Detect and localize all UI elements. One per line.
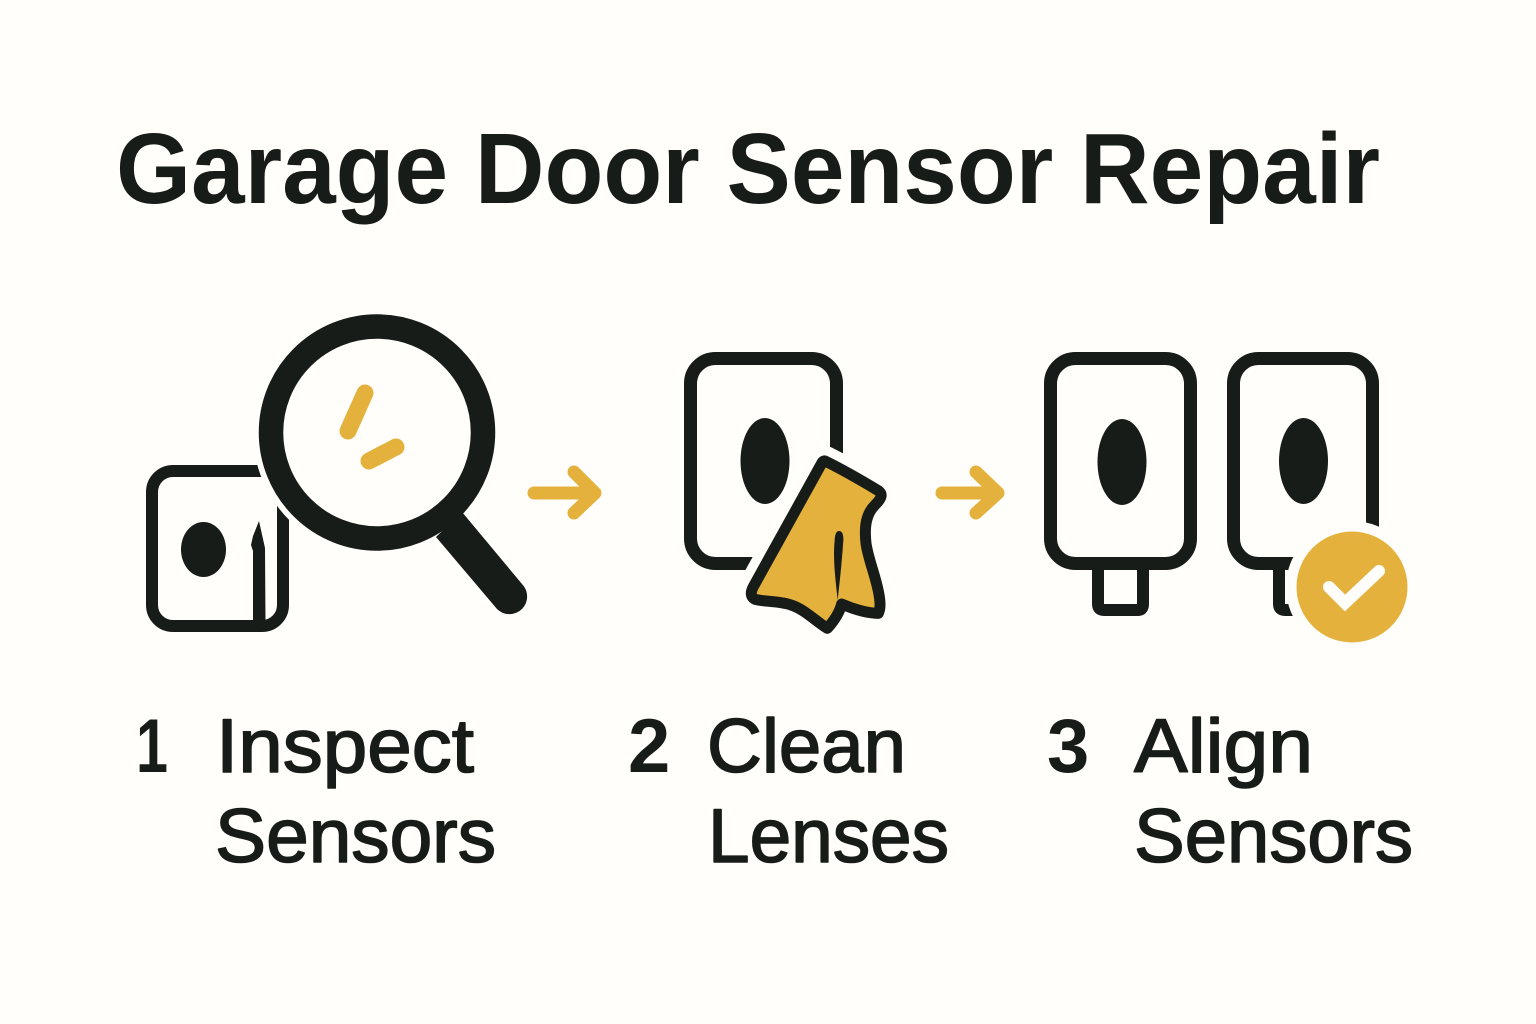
title: Garage Door Sensor Repair: [116, 113, 1380, 225]
step 3 label: [1047, 704, 1413, 879]
icon: magnifying glass: [271, 326, 527, 614]
icon: check mark badge: [1286, 521, 1418, 653]
icon: sensor under magnifying glass: [152, 308, 501, 626]
icon: yellow cleaning cloth: [751, 461, 881, 628]
icon: right aligned sensor: [1234, 358, 1372, 610]
step 2 label: 2: [628, 704, 670, 789]
step 1 label: Sensors: [215, 794, 496, 879]
step 2 label: Clean: [707, 704, 906, 789]
step 2 label: [628, 704, 949, 879]
step 1 label: Inspect: [216, 704, 474, 789]
arrow: step 1 to step 2: [534, 472, 595, 513]
step 2 label: Lenses: [708, 794, 949, 879]
icon: sensor being cleaned: [690, 358, 836, 564]
step 3 label: Align: [1134, 704, 1313, 789]
step 3 label: 3: [1047, 704, 1089, 789]
step 3 label: Sensors: [1134, 794, 1413, 879]
arrow: step 2 to step 3: [942, 472, 998, 513]
step 1 label: 1: [136, 704, 168, 789]
step 1 label: [136, 704, 496, 879]
icon: left aligned sensor: [1050, 358, 1190, 610]
